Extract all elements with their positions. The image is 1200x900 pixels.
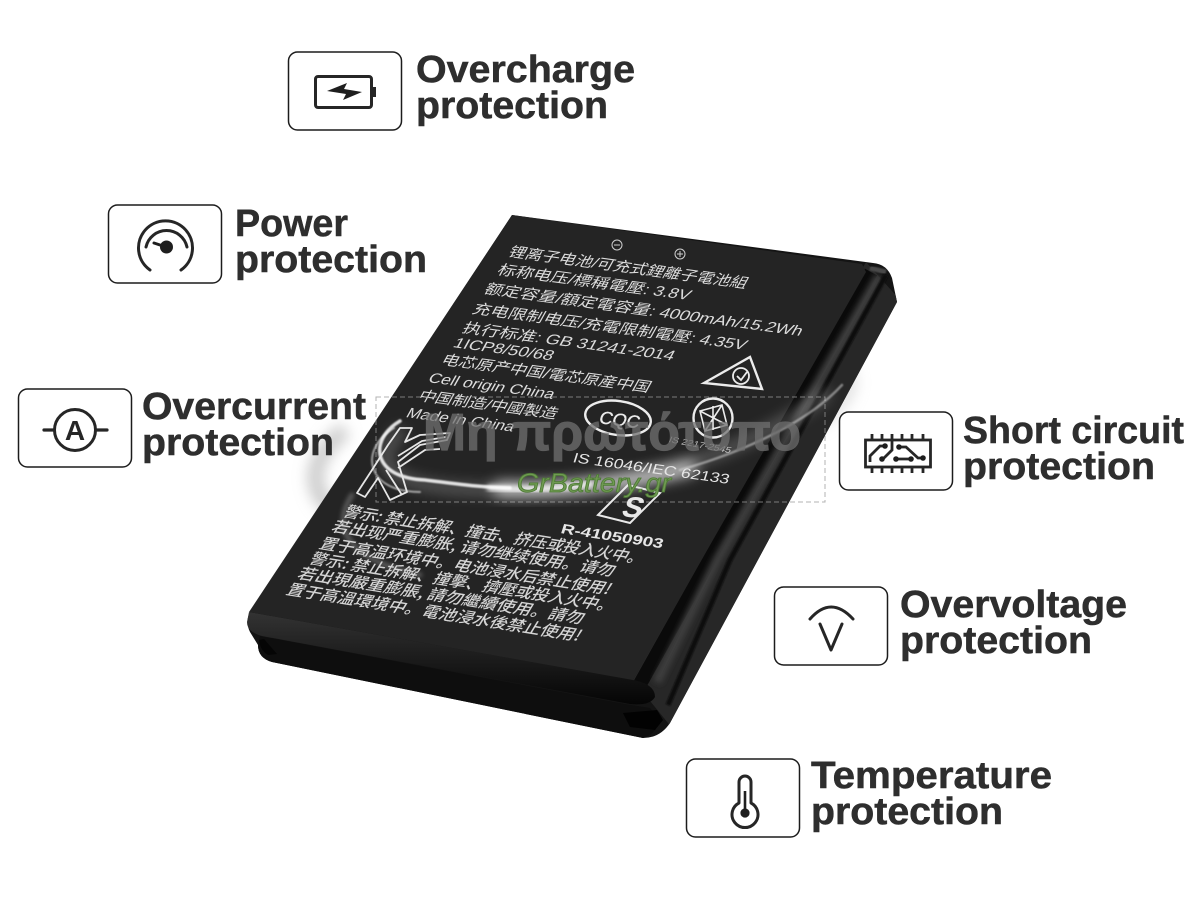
- S mark: [598, 485, 660, 525]
- warning text: [282, 499, 652, 645]
- warning text: 若出現嚴重膨脹, 請勿繼續使用。請勿: [293, 561, 591, 628]
- watermark text greek: Μη πρωτότυπο: [423, 404, 801, 462]
- battery body silhouette: [248, 215, 897, 738]
- icon: battery bolt: [316, 76, 374, 108]
- left notch: [259, 639, 277, 655]
- panel: power protection: protection: [235, 239, 427, 281]
- warning text: 若出现严重膨胀, 请勿继续使用。请勿: [327, 514, 622, 580]
- panel: temperature protection: [686, 755, 1052, 837]
- CQC oval: [583, 397, 653, 439]
- battery right side band: [633, 262, 900, 728]
- panel: overvoltage protection: [774, 584, 1127, 665]
- label text upper: 锂离子电池/可充式鋰離子電池組: [505, 244, 752, 292]
- panel: overcharge protection: [288, 49, 635, 130]
- label text upper: 标称电压/標稱電壓: 3.8V: [494, 263, 695, 304]
- icon: ammeter: [44, 410, 107, 450]
- panel: temperature protection: Temperature: [811, 755, 1052, 797]
- label text middle: IS 16046/IEC 62133: [571, 450, 732, 487]
- S mark: S: [618, 492, 649, 525]
- icon: gauge: [139, 221, 192, 270]
- watermark text site: GrBattery.gr: [517, 468, 672, 498]
- panel: temperature protection: protection: [811, 791, 1003, 833]
- battery top face: [249, 215, 866, 680]
- icon: voltage: [810, 607, 853, 650]
- panel: overcurrent protection: protection: [142, 422, 334, 464]
- label text upper: 电芯原产中国/電芯原産中国: [438, 353, 654, 396]
- panel: overvoltage protection: Overvoltage: [900, 584, 1127, 626]
- KC style logo: [357, 428, 450, 500]
- certification logos: [583, 357, 762, 455]
- label text upper: [403, 244, 806, 435]
- swirl halo behind battery: [315, 345, 851, 525]
- panel: short circuit protection: protection: [963, 446, 1155, 488]
- BIS mark: [694, 398, 732, 438]
- label text upper: 充电限制电压/充電限制電壓: 4.35V: [469, 302, 751, 354]
- warning text: 置于高溫環境中。電池浸水後禁止使用!: [282, 577, 588, 645]
- label text upper: Cell origin China: [425, 371, 559, 402]
- warning text: 置于高温环境中。电池浸水后禁止使用!: [315, 531, 618, 599]
- right notch: [623, 710, 663, 730]
- label text upper: 中国制造/中國製造: [415, 389, 561, 422]
- battery front lip: [247, 612, 655, 704]
- label text upper: 执行标准: GB 31241-2014: [459, 321, 679, 364]
- registration number: R-41050903: [559, 521, 666, 551]
- panel: short circuit protection: Short circuit: [963, 410, 1184, 452]
- icon: thermometer: [732, 776, 758, 828]
- RCM triangle: [704, 357, 762, 389]
- warning text: 警示: 禁止拆解、撞擊、擠壓或投入火中。: [305, 546, 622, 616]
- watermark dashed frame: [376, 397, 825, 502]
- panel: overcharge protection: protection: [416, 85, 608, 127]
- battery lower front: [258, 636, 660, 738]
- swirl light: [343, 385, 842, 575]
- battery: [247, 215, 900, 738]
- panel: power protection: [108, 203, 427, 283]
- label text upper: 额定容量/額定電容量: 4000mAh/15.2Wh: [481, 282, 806, 339]
- panel: short circuit protection: [840, 410, 1184, 490]
- warning text: 警示: 禁止拆解、撞击、挤压或投入火中。: [339, 499, 652, 568]
- panel: overvoltage protection: protection: [900, 620, 1092, 662]
- panel: overcurrent protection: [18, 386, 366, 467]
- icon: circuit chip: [866, 434, 930, 473]
- icon: ammeter: A: [65, 415, 85, 446]
- label text upper: Made in China: [403, 406, 519, 435]
- polarity marks: [612, 240, 685, 259]
- label text upper: 1ICP8/50/68: [450, 336, 557, 364]
- panel: overcurrent protection: Overcurrent: [142, 386, 366, 428]
- panel: overcharge protection: Overcharge: [416, 49, 635, 91]
- standard number: IS 2217-2545: [667, 435, 733, 455]
- CQC oval: CQC: [597, 408, 643, 432]
- panel: power protection: Power: [235, 203, 348, 245]
